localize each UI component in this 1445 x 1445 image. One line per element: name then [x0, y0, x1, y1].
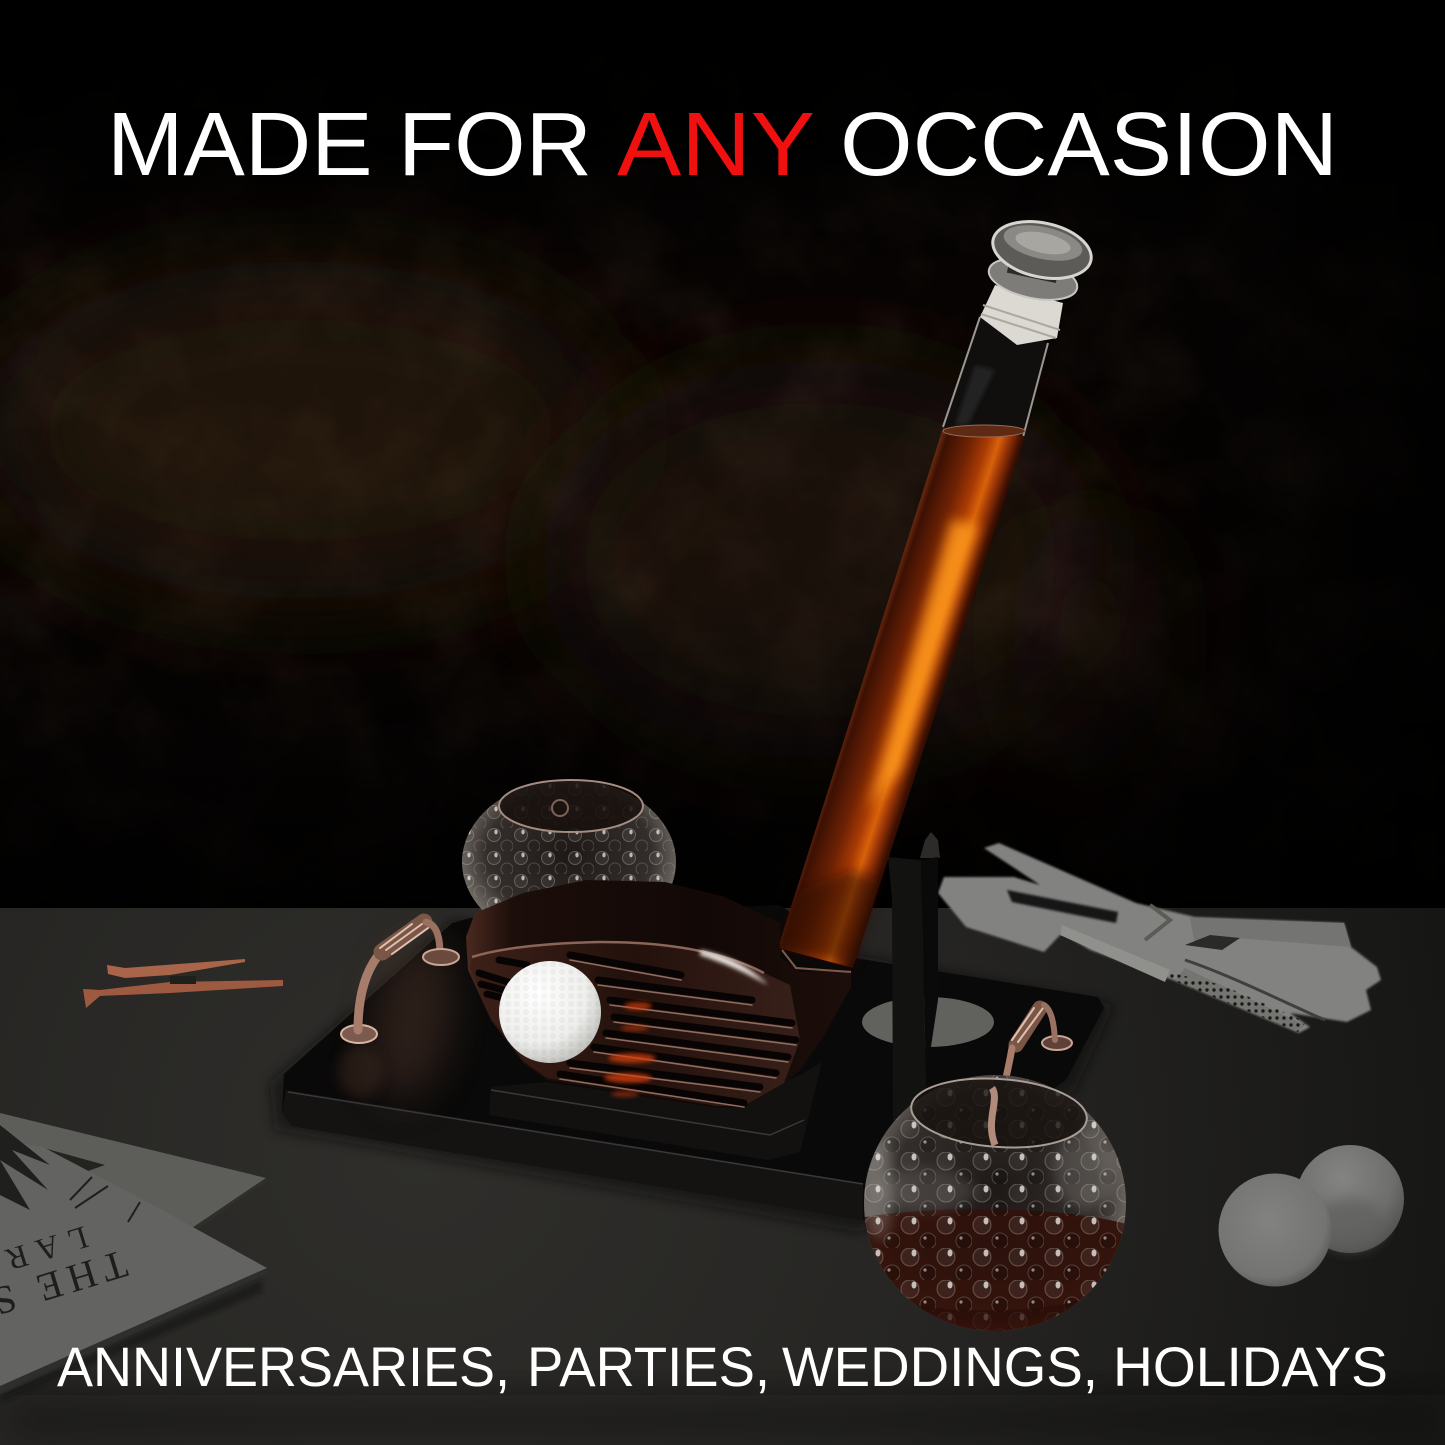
gloves	[938, 843, 1381, 1033]
club head decanter	[466, 880, 851, 1108]
background wall	[0, 0, 1445, 910]
grey golf balls	[1218, 1145, 1404, 1286]
title: ANY	[617, 95, 815, 195]
magazines	[0, 1113, 268, 1403]
title	[107, 95, 1338, 195]
decanter stopper	[980, 213, 1097, 345]
decanter shaft with liquid	[778, 317, 1048, 968]
glass rim opening	[909, 1073, 1089, 1153]
club face grooves	[479, 955, 796, 1107]
occasions caption: HOLIDAYS	[1113, 1335, 1388, 1398]
occasions caption	[57, 1335, 1388, 1398]
title: OCCASION	[840, 95, 1338, 195]
left tray handle	[341, 922, 459, 1043]
table surface	[0, 908, 1445, 1445]
far whisky glass	[462, 779, 676, 910]
black tray	[270, 832, 1114, 1232]
right tray handle	[1006, 1005, 1072, 1078]
occasions caption: PARTIES,	[527, 1335, 770, 1398]
white golf ball	[499, 961, 601, 1063]
golf tees	[83, 959, 283, 1008]
occasions caption: ANNIVERSARIES,	[57, 1335, 510, 1398]
title: MADE FOR	[107, 95, 592, 195]
occasions caption: WEDDINGS,	[782, 1335, 1098, 1398]
near whisky glass	[860, 1070, 1130, 1340]
